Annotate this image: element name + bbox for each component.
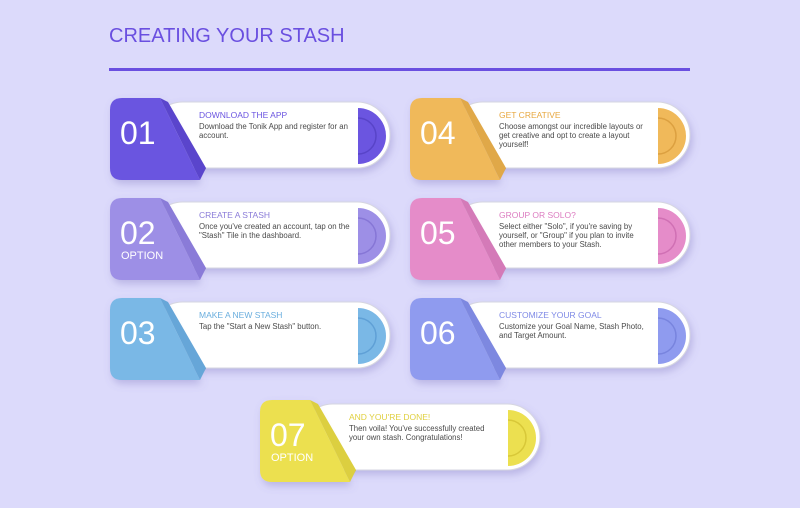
card 07: your own stash. Congratulations! (349, 433, 463, 442)
card 02: CREATE A STASH (199, 210, 270, 220)
card 03 (110, 298, 390, 380)
card 03: Tap the "Start a New Stash" button. (199, 322, 321, 331)
card 07: Then voila! You've successfully created (349, 424, 484, 433)
card 02 (110, 198, 390, 280)
card 07: OPTION (271, 452, 313, 464)
card 04: yourself! (499, 140, 528, 149)
card 05: Select either "Solo", if you're saving by (499, 222, 632, 231)
card 07: AND YOU'RE DONE! (349, 412, 430, 422)
card 04: GET CREATIVE (499, 110, 561, 120)
card 02: OPTION (121, 250, 163, 262)
card 01: 01 (120, 115, 156, 151)
card 05: 05 (420, 215, 456, 251)
card 07: 07 (270, 417, 306, 453)
card 05: yourself, or "Group" if you plan to invite (499, 231, 634, 240)
card 06 (410, 298, 690, 380)
card 01: account. (199, 131, 228, 140)
card 04: 04 (420, 115, 456, 151)
card 03: MAKE A NEW STASH (199, 310, 282, 320)
card 03: 03 (120, 315, 156, 351)
card 06: 06 (420, 315, 456, 351)
card 02: 02 (120, 215, 156, 251)
card 01 (110, 98, 390, 180)
card 02: "Stash" Tile in the dashboard. (199, 231, 301, 240)
card 04: get creative and opt to create a layout (499, 131, 630, 140)
title: CREATING YOUR STASH (109, 25, 345, 47)
card 07 (260, 400, 540, 482)
card 04: Choose amongst our incredible layouts or (499, 122, 643, 131)
card 06: Customize your Goal Name, Stash Photo, (499, 322, 644, 331)
card 05: other members to your Stash. (499, 240, 602, 249)
card 01: DOWNLOAD THE APP (199, 110, 287, 120)
card 06: CUSTOMIZE YOUR GOAL (499, 310, 602, 320)
card 01: Download the Tonik App and register for an (199, 122, 348, 131)
card 04 (410, 98, 690, 180)
card 06: and Target Amount. (499, 331, 566, 340)
card 02: Once you've created an account, tap on the (199, 222, 350, 231)
card 05: GROUP OR SOLO? (499, 210, 576, 220)
card 05 (410, 198, 690, 280)
